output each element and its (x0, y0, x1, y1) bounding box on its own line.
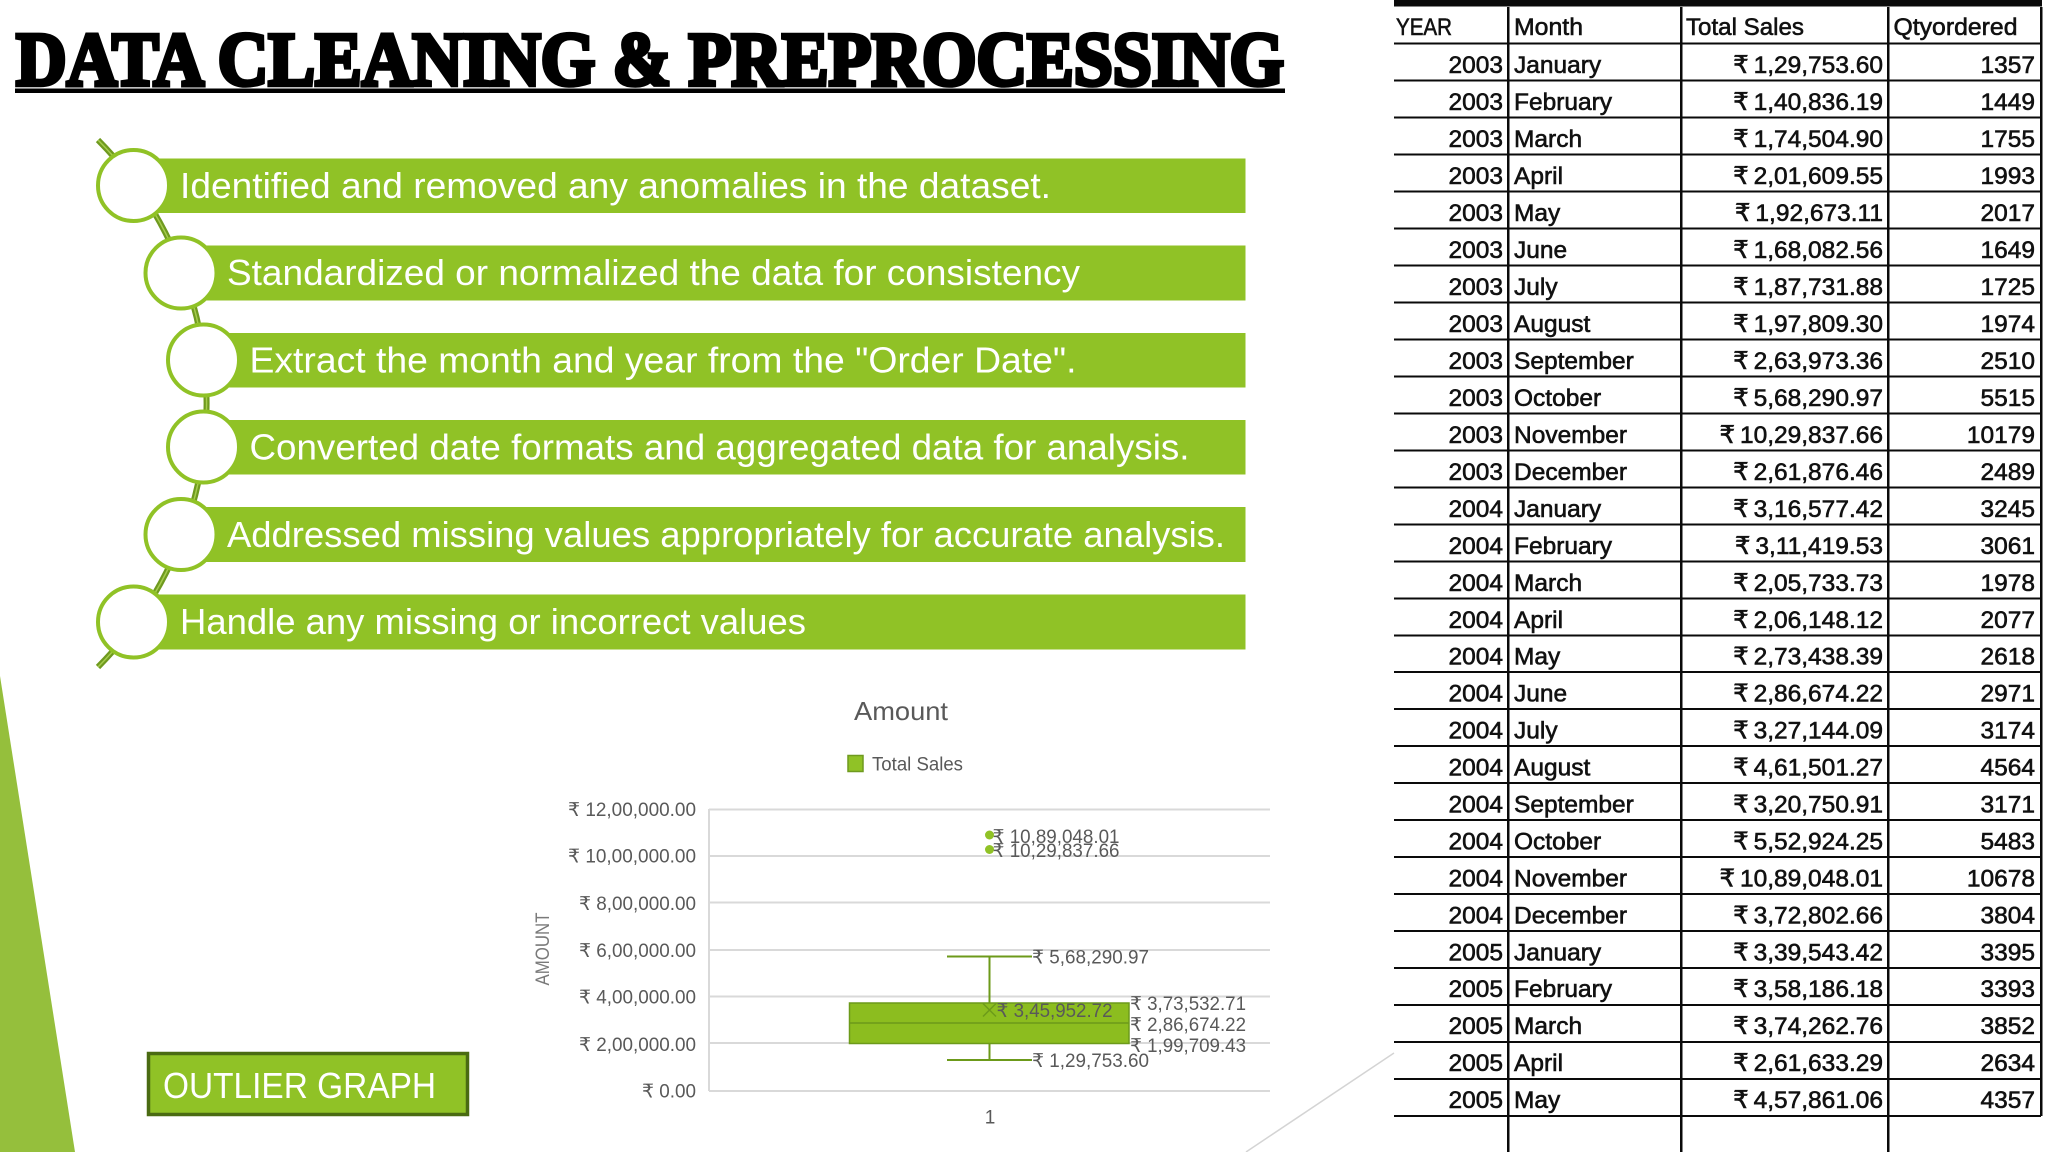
table grid (1394, 0, 2042, 1152)
row: 2004 (1448, 792, 1503, 818)
row: 2077 (1980, 607, 2035, 634)
row: 10179 (1967, 422, 2035, 449)
row: ₹ 1,40,836.19 (1733, 89, 1883, 116)
table header: Total Sales (1686, 14, 1804, 41)
row (1448, 902, 2035, 930)
grid lines (709, 809, 1270, 1091)
row: ₹ 1,74,504.90 (1733, 126, 1883, 153)
row: 2003 (1448, 237, 1503, 264)
x axis label: 1 (985, 1108, 995, 1128)
row: April (1514, 607, 1563, 634)
row: November (1514, 422, 1627, 449)
outlier graph label: OUTLIER GRAPH (163, 1065, 436, 1106)
step 5 (146, 499, 1246, 570)
row: December (1514, 459, 1627, 486)
row: ₹ 3,11,419.53 (1735, 533, 1883, 560)
row: February (1514, 89, 1613, 116)
table header: YEAR (1396, 14, 1452, 41)
row (1448, 422, 2035, 449)
row: 2971 (1980, 680, 2035, 708)
legend: Total Sales (872, 754, 963, 776)
row: 2004 (1448, 718, 1503, 744)
row (1448, 1087, 2035, 1114)
axis title: AMOUNT (533, 912, 554, 986)
box plot chart (533, 696, 1270, 1128)
row: ₹ 1,87,731.88 (1733, 274, 1883, 301)
row (1448, 163, 2035, 190)
y axis labels: ₹ 10,00,000.00 (568, 846, 696, 868)
row: 5515 (1980, 385, 2035, 412)
row (1448, 126, 2035, 153)
row (1448, 274, 2035, 301)
row: 2634 (1980, 1050, 2035, 1077)
data labels (992, 827, 1246, 1072)
row: 2005 (1448, 1050, 1503, 1077)
row: 1649 (1980, 237, 2035, 264)
mean marker (983, 1004, 996, 1016)
step 4: Converted date formats and aggregated data for analysis. (250, 426, 1190, 468)
row: ₹ 3,74,262.76 (1733, 1013, 1883, 1040)
row: 2003 (1448, 348, 1503, 375)
row: ₹ 1,29,753.60 (1733, 52, 1883, 79)
row: 2005 (1448, 1087, 1503, 1114)
outlier points (985, 830, 994, 854)
data labels: ₹ 1,99,709.43 (1130, 1036, 1246, 1057)
row (1448, 644, 2035, 670)
chart title: Amount (854, 696, 949, 726)
row: 2004 (1448, 680, 1503, 708)
step 3 (168, 324, 1246, 396)
row: 2003 (1448, 163, 1503, 190)
row: 2005 (1448, 976, 1503, 1003)
row: February (1514, 533, 1613, 560)
row: September (1514, 792, 1634, 818)
row: ₹ 10,29,837.66 (1719, 422, 1883, 449)
step 2 (146, 238, 1246, 308)
step 6: Handle any missing or incorrect values (180, 601, 806, 642)
row: ₹ 2,73,438.39 (1733, 644, 1883, 670)
row: ₹ 2,01,609.55 (1733, 163, 1883, 190)
row: April (1514, 1050, 1563, 1077)
row: ₹ 3,39,543.42 (1733, 940, 1883, 966)
row: ₹ 3,72,802.66 (1733, 902, 1883, 930)
row (1448, 459, 2035, 486)
row: January (1514, 52, 1602, 79)
row: 2003 (1448, 422, 1503, 449)
row: May (1514, 644, 1561, 670)
left green wedge decoration (0, 676, 75, 1152)
connector arc (98, 140, 207, 667)
row (1448, 89, 2035, 116)
row: 3804 (1980, 902, 2035, 930)
row: June (1514, 237, 1567, 264)
row (1448, 348, 2035, 375)
row: ₹ 2,61,633.29 (1733, 1050, 1883, 1077)
row: 2005 (1448, 1013, 1503, 1040)
row: 3171 (1980, 792, 2035, 818)
row: 1755 (1980, 126, 2035, 153)
row: 4357 (1980, 1087, 2035, 1114)
row: 2003 (1448, 126, 1503, 153)
table header: Month (1514, 14, 1583, 41)
row: ₹ 4,61,501.27 (1733, 754, 1883, 782)
row (1448, 52, 2035, 79)
row: 2004 (1448, 866, 1503, 892)
row (1448, 828, 2035, 856)
row: April (1514, 163, 1563, 190)
table header (1396, 14, 2018, 41)
table header: Qtyordered (1894, 14, 2018, 41)
row: ₹ 2,86,674.22 (1733, 680, 1883, 708)
row: 2003 (1448, 459, 1503, 486)
data labels: ₹ 3,45,952.72 (996, 1001, 1112, 1022)
step 4 (168, 412, 1246, 482)
row: 2003 (1448, 200, 1503, 227)
row: ₹ 3,20,750.91 (1733, 792, 1883, 818)
row: ₹ 4,57,861.06 (1733, 1087, 1883, 1114)
row: 1974 (1980, 311, 2035, 338)
row (1448, 940, 2035, 966)
y axis labels: ₹ 2,00,000.00 (579, 1035, 696, 1056)
row: 2003 (1448, 274, 1503, 301)
row: ₹ 1,68,082.56 (1733, 237, 1883, 264)
step 3: Extract the month and year from the "Order Date". (250, 340, 1076, 380)
row (1448, 1013, 2035, 1040)
data labels: ₹ 10,89,048.01 (992, 827, 1120, 848)
row: 1357 (1980, 52, 2035, 79)
row (1448, 607, 2035, 634)
row (1448, 680, 2035, 708)
step 5: Addressed missing values appropriately for accurate analysis. (227, 514, 1225, 555)
whiskers (947, 956, 1032, 1060)
row: October (1514, 828, 1601, 856)
row: ₹ 3,58,186.18 (1733, 976, 1883, 1003)
row: May (1514, 200, 1561, 227)
row: 2003 (1448, 52, 1503, 79)
row: 1449 (1980, 89, 2035, 116)
row: March (1514, 570, 1582, 597)
row (1448, 200, 2035, 227)
row: 2004 (1448, 607, 1503, 634)
row: 10678 (1967, 866, 2035, 892)
row: 2004 (1448, 496, 1503, 523)
data labels: ₹ 2,86,674.22 (1130, 1015, 1246, 1036)
row (1448, 237, 2035, 264)
step 1 (98, 150, 1246, 221)
box (850, 1003, 1129, 1044)
row (1448, 976, 2035, 1003)
row (1448, 1050, 2035, 1077)
row (1448, 792, 2035, 818)
row: 2004 (1448, 570, 1503, 597)
row: July (1514, 718, 1558, 744)
y axis labels: ₹ 0.00 (642, 1082, 696, 1102)
row: ₹ 1,92,673.11 (1735, 200, 1883, 227)
row: 2003 (1448, 311, 1503, 338)
row: January (1514, 496, 1602, 523)
row: October (1514, 385, 1601, 412)
row: 2510 (1980, 348, 2035, 375)
row (1448, 718, 2035, 744)
row: November (1514, 866, 1627, 892)
data labels: ₹ 1,29,753.60 (1032, 1051, 1149, 1072)
row: ₹ 2,61,876.46 (1733, 459, 1883, 486)
row (1448, 496, 2035, 523)
step 1: Identified and removed any anomalies in the dataset. (180, 165, 1051, 206)
row: September (1514, 348, 1634, 375)
row: ₹ 10,89,048.01 (1719, 866, 1883, 892)
row: ₹ 3,16,577.42 (1733, 496, 1883, 523)
row (1448, 311, 2035, 338)
row: August (1514, 311, 1590, 338)
row: 2004 (1448, 754, 1503, 782)
data labels: ₹ 3,73,532.71 (1130, 994, 1246, 1015)
median line (850, 1022, 1129, 1024)
row: June (1514, 680, 1567, 708)
sales data table (1394, 0, 2042, 1152)
panel: cleaning steps list (98, 140, 1246, 667)
row: 2017 (1980, 200, 2035, 227)
row (1448, 754, 2035, 782)
row: 2489 (1980, 459, 2035, 486)
title: DATA CLEANING & PREPROCESSING (16, 18, 1284, 102)
row: 3174 (1980, 718, 2035, 744)
row: January (1514, 940, 1602, 966)
y axis labels: ₹ 4,00,000.00 (579, 988, 696, 1008)
row: ₹ 5,68,290.97 (1733, 385, 1883, 412)
data labels: ₹ 5,68,290.97 (1032, 948, 1149, 968)
row: March (1514, 126, 1582, 153)
row: May (1514, 1087, 1561, 1114)
step 6 (98, 586, 1246, 658)
y axis labels (568, 800, 696, 1102)
row: December (1514, 902, 1627, 930)
row: ₹ 2,06,148.12 (1733, 607, 1883, 634)
row: 1993 (1980, 163, 2035, 190)
row (1448, 533, 2035, 560)
row: 2004 (1448, 902, 1503, 930)
row: ₹ 1,97,809.30 (1733, 311, 1883, 338)
row: 3852 (1980, 1013, 2035, 1040)
row: July (1514, 274, 1558, 301)
row: 1725 (1980, 274, 2035, 301)
row: February (1514, 976, 1613, 1003)
row: ₹ 2,63,973.36 (1733, 348, 1883, 375)
row: 2004 (1448, 644, 1503, 670)
row: 3393 (1980, 976, 2035, 1003)
row: August (1514, 754, 1590, 782)
row: March (1514, 1013, 1582, 1040)
faint diagonal corner line (1246, 1053, 1394, 1152)
row (1448, 385, 2035, 412)
row: 2003 (1448, 385, 1503, 412)
row: ₹ 3,27,144.09 (1733, 718, 1883, 744)
row: 3245 (1980, 496, 2035, 523)
data labels: ₹ 10,29,837.66 (992, 841, 1120, 862)
y axis labels: ₹ 12,00,000.00 (568, 800, 696, 821)
y axis labels: ₹ 6,00,000.00 (579, 941, 696, 962)
step 2: Standardized or normalized the data for consistency (227, 252, 1080, 293)
row: 2618 (1980, 644, 2035, 670)
row: 2004 (1448, 533, 1503, 560)
row: ₹ 5,52,924.25 (1733, 828, 1883, 856)
row: 3061 (1980, 533, 2035, 560)
row: 1978 (1980, 570, 2035, 597)
row: 4564 (1980, 754, 2035, 782)
row: 3395 (1980, 940, 2035, 966)
row: 5483 (1980, 828, 2035, 856)
row: ₹ 2,05,733.73 (1733, 570, 1883, 597)
row: 2003 (1448, 89, 1503, 116)
row: 2005 (1448, 940, 1503, 966)
row (1448, 866, 2035, 892)
y axis labels: ₹ 8,00,000.00 (579, 894, 696, 915)
row (1448, 570, 2035, 597)
row: 2004 (1448, 828, 1503, 856)
outlier graph label (148, 1054, 468, 1114)
